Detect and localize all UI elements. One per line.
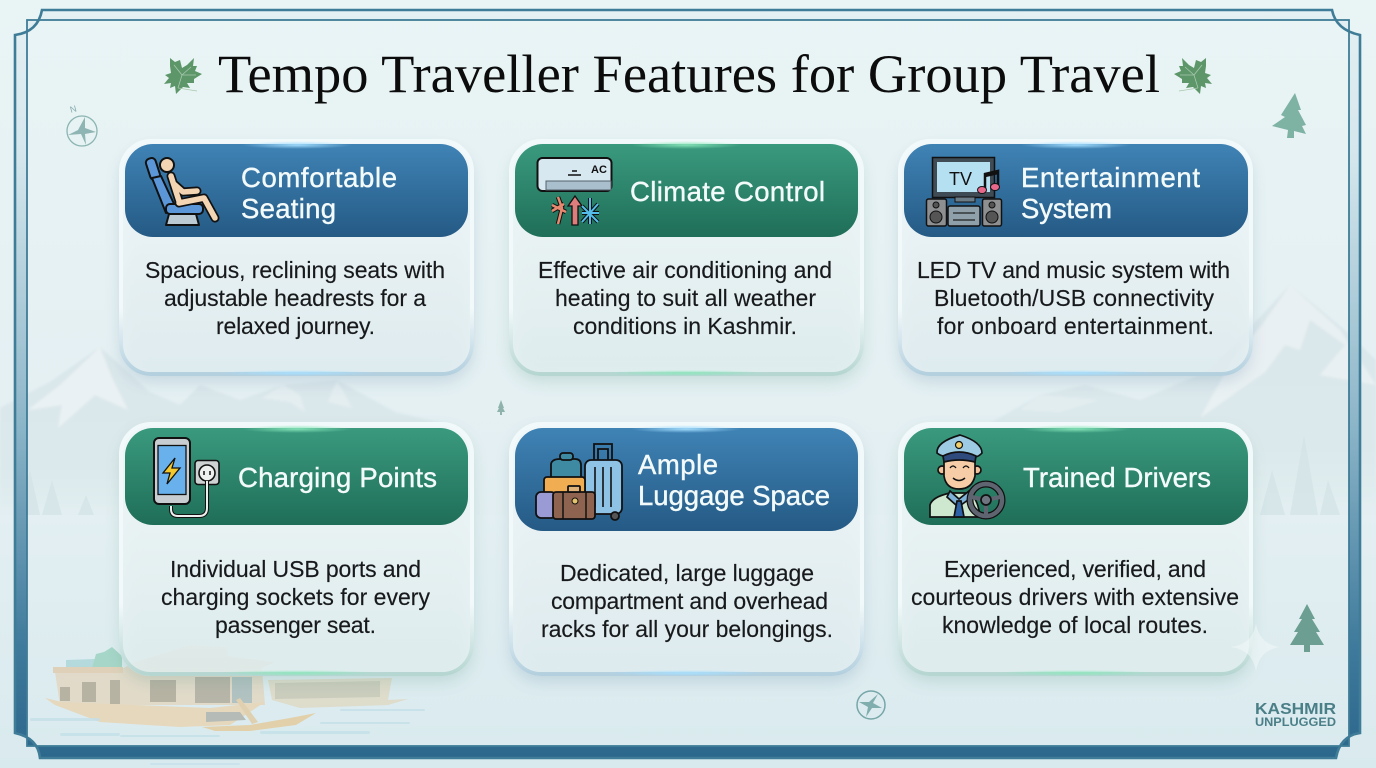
panel: comfortable seating	[121, 141, 472, 381]
description: Spacious, reclining seats with	[145, 257, 445, 283]
icon: maple leaf left	[164, 58, 202, 94]
icon: tv and speakers: TV	[949, 169, 972, 189]
icon: pine tree bottom right	[1290, 604, 1324, 652]
mountains: right	[960, 285, 1376, 520]
heading: System	[1021, 193, 1112, 224]
logo: KASHMIR	[1255, 701, 1336, 718]
icon: tv and speakers	[926, 158, 1002, 226]
heading: Luggage Space	[638, 480, 830, 511]
icon: luggage pile	[536, 444, 622, 520]
description: relaxed journey.	[216, 313, 375, 339]
header	[125, 428, 468, 525]
header	[904, 428, 1248, 525]
description: passenger seat.	[215, 612, 376, 638]
panel: climate control	[511, 141, 862, 381]
main houseboat	[45, 645, 275, 727]
description: adjustable headrests for a	[164, 285, 426, 311]
heading: Comfortable	[241, 162, 397, 193]
logo	[1255, 701, 1336, 729]
logo: UNPLUGGED	[1255, 715, 1336, 729]
panel: charging points	[121, 424, 472, 681]
icon: compass top left	[67, 104, 97, 146]
panel: trained drivers	[900, 424, 1251, 681]
icon: reclining seat	[145, 157, 215, 225]
icon: air conditioner: AC	[591, 164, 607, 176]
icon: air conditioner	[538, 158, 612, 225]
description: LED TV and music system with	[917, 257, 1230, 283]
icon: phone charger	[154, 438, 219, 516]
description: racks for all your belongings.	[541, 616, 833, 642]
panel: ample luggage space	[511, 424, 862, 681]
description: Experienced, verified, and	[944, 556, 1206, 582]
sparkle	[1231, 623, 1280, 672]
panel: entertainment system	[900, 141, 1251, 381]
icon: pine tree top right	[1272, 93, 1306, 138]
icon: compass bottom	[857, 691, 885, 719]
heading: Seating	[241, 193, 336, 224]
heading: Trained Drivers	[1023, 462, 1211, 493]
icon: driver	[930, 435, 1002, 517]
description: charging sockets for every	[161, 584, 430, 610]
description: compartment and overhead	[551, 588, 828, 614]
icon: small tree	[497, 400, 505, 415]
description: Bluetooth/USB connectivity	[934, 285, 1214, 311]
description: conditions in Kashmir.	[573, 313, 797, 339]
shikara	[202, 713, 316, 731]
heading: Ample	[638, 449, 718, 480]
description: for onboard entertainment.	[937, 313, 1214, 339]
heading: Charging Points	[238, 462, 437, 493]
second houseboat	[268, 678, 408, 708]
icon: compass top left: N	[69, 104, 78, 115]
tree lines	[18, 435, 1340, 515]
description: Individual USB ports and	[170, 556, 421, 582]
water ripples	[30, 709, 425, 765]
description: knowledge of local routes.	[942, 612, 1208, 638]
header	[515, 144, 858, 237]
heading: Entertainment	[1021, 162, 1200, 193]
description: Dedicated, large luggage	[560, 560, 814, 586]
lake	[0, 515, 1376, 768]
description: Effective air conditioning and	[538, 257, 832, 283]
mountains: left	[0, 347, 470, 520]
description: courteous drivers with extensive	[911, 584, 1239, 610]
header	[515, 428, 858, 531]
icon: maple leaf right	[1174, 58, 1212, 94]
header	[125, 144, 468, 237]
header	[904, 144, 1248, 237]
houseboats	[45, 645, 408, 731]
description: heating to suit all weather	[555, 285, 816, 311]
title: Tempo Traveller Features for Group Travel	[218, 44, 1160, 104]
heading: Climate Control	[630, 176, 825, 207]
